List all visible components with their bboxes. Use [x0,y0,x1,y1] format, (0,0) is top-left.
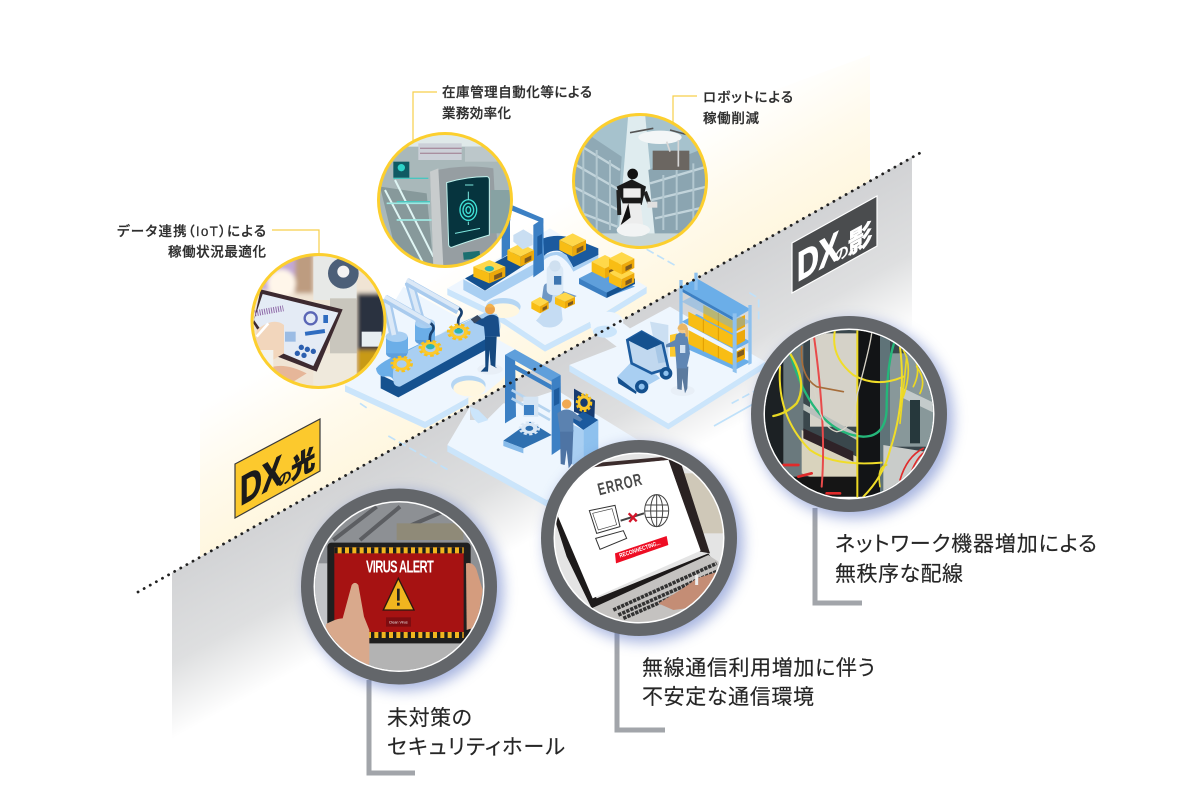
operator [557,399,583,468]
panel: DXの光 badge: の [277,467,292,492]
label: unstable wireless: 不安定な通信環境 [642,686,814,709]
panel: DXの影 badge: の [834,242,849,267]
photo circle: connection error: RECONNECTING... [619,540,662,560]
leader line: wireless [617,632,665,730]
panel: DXの光 badge: DX [240,447,282,516]
label: robots [703,90,793,126]
robot arm [531,260,577,327]
panel: DXの影 badge: DX [797,223,839,292]
platform: forklift and shelves [569,307,765,429]
light zone background [200,55,870,557]
photo circle: drone and humanoid robot [572,113,708,250]
factory illustration [345,205,765,507]
label: inventory automation: 在庫管理自動化等による [442,84,592,100]
platform: box conveyor [447,228,647,352]
leader line: cabling [815,508,862,603]
label: disorderly cabling [835,533,1097,586]
label: IoT: データ連携（IoT）による [117,223,266,239]
label: IoT: 稼働状況最適化 [168,244,266,260]
3D printer [503,349,561,455]
label: IoT [117,223,266,260]
photo circle: virus alert [301,488,503,690]
leader line: IoT [272,230,319,256]
worker with tablet [471,304,503,375]
leader line: robot [673,96,697,124]
label: inventory automation: 業務効率化 [442,106,512,121]
pallet with boxes [579,252,635,298]
label: security hole: 未対策の [387,707,472,730]
photo circle: connection error: ERROR [596,471,645,500]
photo circle: virus alert: Clean Virus [389,621,408,625]
leader line: inventory [413,92,437,142]
panel: DXの光 badge [235,419,320,518]
photo circle: virus alert: VIRUS ALERT [366,557,434,577]
terminal with gear screen [570,389,598,470]
conveyor with boxes [463,205,598,302]
label: security hole: セキュリティホール [387,736,565,759]
label: disorderly cabling: ネットワーク機器増加による [835,533,1097,556]
photo circle: inventory kiosk [377,132,513,268]
platform: arm conveyor [345,287,517,428]
photo circle: connection error [541,440,743,642]
label: robots: ロボットによる [703,90,793,105]
label: unstable wireless [642,657,875,709]
label: security hole [387,707,565,759]
dashed flow arrows [360,249,759,470]
label: robots: 稼働削減 [703,110,760,126]
label: disorderly cabling: 無秩序な配線 [835,563,963,586]
dotted divider line [138,153,920,592]
woman worker [666,323,695,396]
shadow zone background [172,157,912,745]
panel: DXの光 badge: 光 [291,442,315,486]
photo circle: tangled network cables [751,316,953,518]
arm conveyor and robot arms [376,280,500,397]
panel: DXの影 badge: 影 [848,217,872,261]
leader line: security hole [369,680,415,773]
label: unstable wireless: 無線通信利用増加に伴う [642,657,875,680]
platform: 3D printer [447,390,643,507]
panel: DXの影 badge [792,196,877,293]
forklift [617,322,677,394]
photo circle: IoT tablet [247,250,390,393]
shelving unit [679,273,752,373]
label: inventory automation [442,84,592,121]
